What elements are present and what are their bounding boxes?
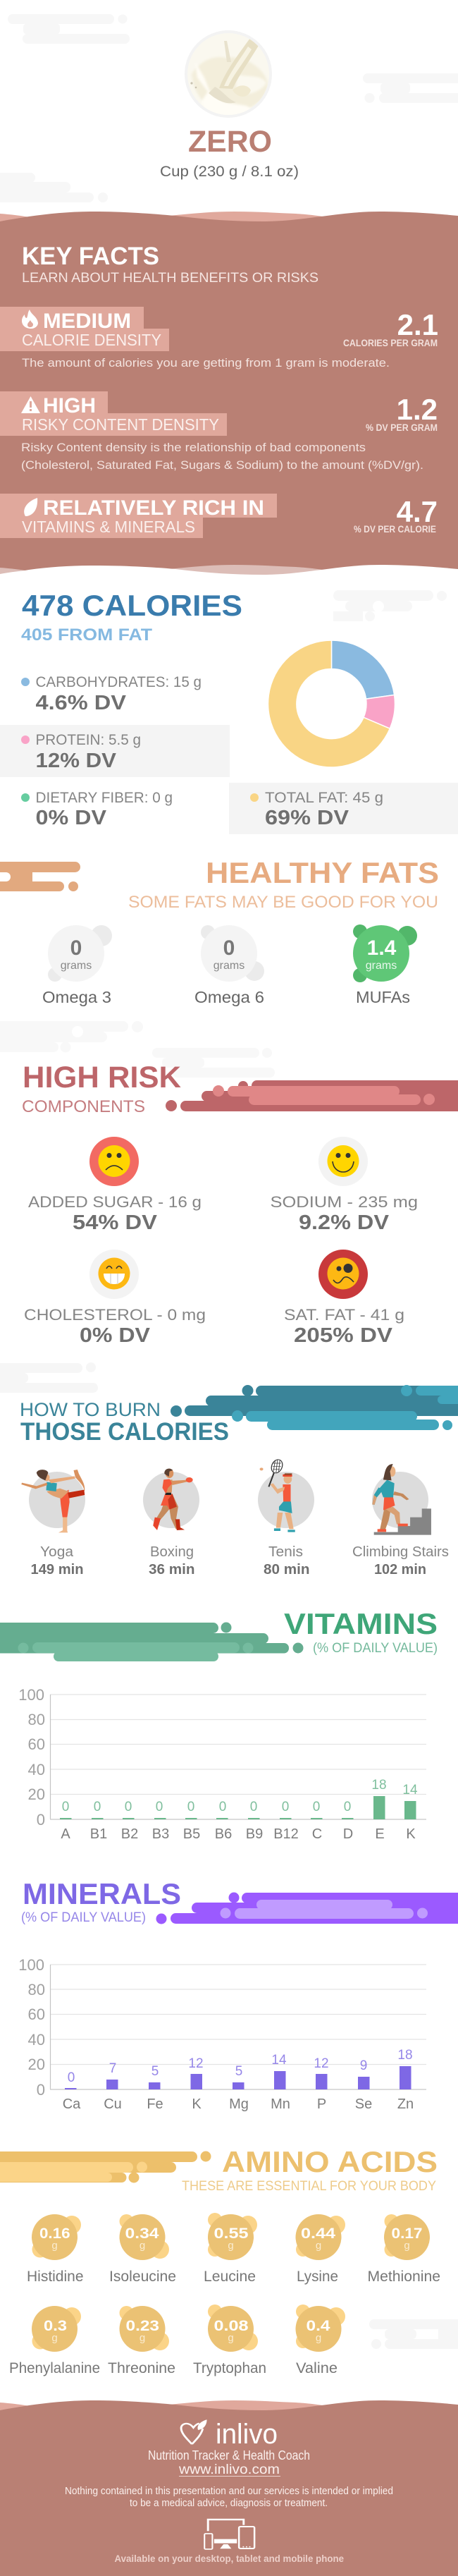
amino: phenylalanine: 0.3	[44, 2318, 67, 2334]
label: climbing stairs: Climbing Stairs	[352, 1544, 449, 1560]
stat: mufas: MUFAs	[356, 988, 410, 1006]
label: boxing: 36 min	[149, 1562, 194, 1577]
panel: how to burn those calories	[20, 1385, 458, 1577]
fact: vitamins and minerals: % DV PER CALORIE	[354, 524, 436, 535]
bar chart: vitamins: B5	[183, 1826, 200, 1842]
legend: carbohydrates	[21, 674, 202, 714]
subheading: key facts: LEARN ABOUT HEALTH BENEFITS OR RISKS	[22, 271, 318, 286]
label: boxing: Boxing	[150, 1544, 194, 1560]
amino: leucine	[204, 2213, 257, 2285]
icon: warning triangle	[21, 396, 40, 413]
subheading: healthy fats: SOME FATS MAY BE GOOD FOR YOU	[128, 893, 438, 912]
stat: omega 3	[42, 925, 112, 1006]
bar chart: vitamins: A	[61, 1826, 70, 1842]
fact: risky content density: HIGH	[43, 394, 96, 417]
icon: flame	[22, 310, 38, 329]
subheading: from fat: 405 FROM FAT	[21, 625, 152, 645]
stat: mufas: 1.4	[367, 936, 397, 960]
legend: protein: 12% DV	[35, 750, 117, 772]
bar chart: minerals: 20	[28, 2056, 45, 2073]
bar chart: vitamins: B1	[90, 1826, 107, 1842]
fact: calorie density: The amount of calories you are getting from 1 gram is moderate.	[22, 356, 390, 370]
bar chart: vitamins: B9	[246, 1826, 263, 1842]
icon: leaf	[24, 498, 37, 516]
amino: tryptophan: 0.08	[214, 2318, 249, 2334]
donut chart	[268, 640, 395, 767]
bar chart: minerals: Se	[355, 2096, 372, 2112]
amino: leucine: 0.55	[214, 2226, 249, 2242]
component: added sugar: ADDED SUGAR - 16 g	[28, 1193, 202, 1211]
fact: risky content density: (Cholesterol, Saturated Fat, Sugars & Sodium) to the amount (%DV/gr).	[21, 458, 423, 472]
bar chart: vitamins: D	[343, 1826, 353, 1842]
legend: total fat: 69% DV	[265, 807, 349, 829]
component: sodium: 9.2% DV	[299, 1211, 390, 1234]
bar chart: vitamins: B6	[215, 1826, 232, 1842]
bar chart: minerals: Cu	[104, 2096, 122, 2112]
logo: inlivo	[181, 2419, 278, 2450]
logo: inlivo: inlivo	[216, 2419, 278, 2450]
legend: total fat	[229, 783, 458, 834]
component: sodium: SODIUM - 235 mg	[271, 1193, 418, 1211]
component: saturated fat	[284, 1250, 404, 1347]
heading: those calories: THOSE CALORIES	[20, 1418, 229, 1446]
bar chart: vitamins: 20	[28, 1786, 45, 1803]
amino: lysine: Lysine	[297, 2269, 338, 2285]
amino: phenylalanine: g	[51, 2332, 58, 2344]
amino: valine: 0.4	[306, 2318, 330, 2334]
panel: amino acids	[0, 2145, 440, 2376]
subheading: minerals: (% OF DAILY VALUE)	[21, 1910, 146, 1925]
tagline: Nutrition Tracker & Health Coach	[148, 2448, 310, 2462]
fact: vitamins and minerals: VITAMINS & MINERALS	[22, 518, 195, 536]
fact: calorie density: MEDIUM	[43, 310, 131, 333]
fact: risky content density: Risky Content density is the relationship of bad components	[21, 441, 366, 454]
component: sodium	[271, 1137, 418, 1234]
bar chart: vitamins: B3	[152, 1826, 169, 1842]
bar chart: minerals: 7	[109, 2061, 116, 2076]
bar chart: vitamins: 14	[402, 1783, 418, 1797]
amino: valine	[296, 2305, 345, 2376]
fact: risky content density: RISKY CONTENT DENSITY	[22, 415, 219, 434]
bar chart: vitamins: 0	[187, 1800, 194, 1814]
heading: how to burn: HOW TO BURN	[20, 1399, 161, 1420]
amino: threonine: Threonine	[108, 2360, 175, 2376]
label: tennis	[264, 1544, 310, 1577]
amino: leucine: g	[228, 2240, 234, 2252]
bar chart: vitamins: 0	[94, 1800, 101, 1814]
bar chart: vitamins: 0	[282, 1800, 289, 1814]
amino: tryptophan: Tryptophan	[193, 2360, 266, 2376]
banner: vitamins	[0, 1622, 303, 1661]
bar chart: vitamins	[18, 1686, 426, 1842]
bar chart: vitamins: 0	[125, 1800, 132, 1814]
value: 4.7: 4.7	[397, 495, 438, 528]
bar chart: vitamins: 0	[37, 1811, 45, 1829]
fact: vitamins and minerals: RELATIVELY RICH IN	[43, 496, 264, 520]
component: saturated fat: SAT. FAT - 41 g	[284, 1306, 404, 1324]
bar chart: vitamins: 80	[28, 1711, 45, 1728]
bar chart: vitamins: 40	[28, 1761, 45, 1778]
panel: minerals	[18, 1877, 458, 2112]
legend: carbohydrates: CARBOHYDRATES: 15 g	[35, 674, 202, 690]
amino: isoleucine: g	[140, 2240, 145, 2252]
bar chart: minerals: 0	[68, 2070, 75, 2085]
stat: omega 3: grams	[61, 960, 92, 972]
bar chart: minerals: K	[192, 2096, 202, 2112]
label: yoga: Yoga	[40, 1544, 74, 1560]
value: 2.1: 2.1	[397, 308, 438, 341]
label: tennis: Tenis	[268, 1544, 303, 1560]
amino: valine: Valine	[296, 2360, 338, 2376]
bar chart: minerals: 14	[271, 2053, 287, 2068]
bar chart: vitamins: K	[406, 1826, 416, 1842]
banner: how to burn	[171, 1385, 458, 1430]
stat: omega 3: Omega 3	[42, 988, 111, 1006]
stat: omega 3: 0	[70, 936, 82, 960]
bar chart: vitamins: 0	[313, 1800, 320, 1814]
website link: www.inlivo.com	[178, 2462, 280, 2477]
bar chart: minerals: Zn	[397, 2096, 414, 2112]
component: cholesterol: 0% DV	[80, 1324, 151, 1347]
fact: vitamins and minerals	[0, 494, 438, 538]
component: added sugar	[28, 1137, 202, 1234]
availability note: Available on your desktop, tablet and mobile phone	[114, 2553, 344, 2564]
bar chart: minerals: Fe	[147, 2096, 163, 2112]
bar chart: minerals: 0	[37, 2081, 45, 2099]
bar chart: vitamins: 60	[28, 1735, 45, 1753]
amino: threonine: g	[140, 2332, 145, 2344]
amino: threonine: 0.23	[125, 2318, 159, 2334]
bar chart: minerals: Ca	[63, 2096, 81, 2112]
subheading: components: COMPONENTS	[22, 1097, 145, 1116]
heading: minerals: MINERALS	[23, 1877, 181, 1910]
disclaimer: to be a medical advice, diagnosis or treatment.	[130, 2497, 328, 2509]
activity: yoga	[21, 1470, 85, 1532]
panel: vitamins	[0, 1607, 438, 1842]
heading: amino acids: AMINO ACIDS	[222, 2145, 438, 2178]
amino: methionine: 0.17	[392, 2226, 423, 2242]
bar chart: minerals: P	[317, 2096, 326, 2112]
amino: threonine	[108, 2306, 175, 2376]
fact: calorie density: CALORIE DENSITY	[22, 331, 161, 349]
bar chart: minerals: 40	[28, 2031, 45, 2049]
heading: vitamins: VITAMINS	[284, 1607, 438, 1640]
fact: risky content density	[0, 391, 438, 472]
legend: protein: PROTEIN: 5.5 g	[35, 732, 141, 748]
bar chart: vitamins: 0	[62, 1800, 69, 1814]
legend: dietary fiber	[21, 790, 173, 829]
legend: carbohydrates: 4.6% DV	[35, 692, 127, 714]
heading: key facts: KEY FACTS	[22, 243, 159, 270]
amino: histidine: Histidine	[27, 2269, 83, 2285]
amino: tryptophan: g	[228, 2332, 234, 2344]
bar chart: minerals: 5	[235, 2064, 242, 2079]
amino: histidine	[27, 2214, 83, 2285]
activity: tennis	[258, 1458, 314, 1532]
banner: minerals	[156, 1893, 458, 1924]
bar chart: vitamins: E	[375, 1826, 385, 1842]
bar chart: vitamins: 0	[250, 1800, 257, 1814]
subheading: amino acids: THESE ARE ESSENTIAL FOR YOUR BODY	[182, 2179, 436, 2194]
legend: dietary fiber: DIETARY FIBER: 0 g	[35, 790, 173, 806]
bar chart: vitamins: 0	[344, 1800, 351, 1814]
bar chart: vitamins: 0	[156, 1800, 163, 1814]
bar chart: minerals: 100	[18, 1956, 44, 1974]
icon: devices	[204, 2520, 254, 2549]
bar chart: vitamins: 100	[18, 1686, 44, 1704]
subheading: vitamins: (% OF DAILY VALUE)	[313, 1641, 438, 1656]
banner: amino acids	[0, 2151, 211, 2183]
amino: methionine: Methionine	[368, 2269, 440, 2285]
disclaimer	[65, 2485, 393, 2509]
bar chart: minerals: Mn	[271, 2096, 290, 2112]
banner: healthy fats	[0, 862, 80, 891]
food image: milk splash	[185, 30, 272, 120]
disclaimer: Nothing contained in this presentation and our services is intended or implied	[65, 2485, 393, 2497]
value: 1.2: 1.2	[397, 393, 438, 426]
fact: risky content density: % DV PER GRAM	[366, 422, 438, 433]
label: yoga: 149 min	[31, 1562, 83, 1577]
stat: omega 6	[194, 925, 264, 1006]
title: ZERO	[188, 125, 272, 159]
stat: mufas: grams	[366, 960, 397, 972]
bar chart: vitamins: 18	[371, 1778, 387, 1793]
fact: calorie density: CALORIES PER GRAM	[343, 338, 438, 348]
heading: healthy fats: HEALTHY FATS	[206, 856, 439, 889]
component: cholesterol: CHOLESTEROL - 0 mg	[24, 1306, 206, 1324]
activity: climbing stairs	[372, 1464, 431, 1535]
amino: methionine	[368, 2214, 440, 2285]
component: added sugar: 54% DV	[73, 1211, 158, 1234]
label: climbing stairs	[352, 1544, 449, 1577]
amino: phenylalanine	[9, 2306, 100, 2376]
activity: boxing	[143, 1469, 199, 1530]
bar chart: vitamins: B2	[121, 1826, 138, 1842]
component: cholesterol	[24, 1250, 206, 1347]
bar chart: minerals: 18	[397, 2048, 413, 2063]
panel: key facts	[0, 212, 458, 585]
bar chart: minerals: 80	[28, 1981, 45, 1998]
amino: tryptophan	[193, 2305, 266, 2376]
amino: lysine	[296, 2214, 345, 2285]
bar chart: minerals: Mg	[229, 2096, 249, 2112]
bar chart: vitamins: 0	[219, 1800, 226, 1814]
amino: lysine: 0.44	[301, 2226, 335, 2242]
label: tennis: 80 min	[264, 1562, 310, 1577]
amino: leucine: Leucine	[204, 2269, 256, 2285]
amino: phenylalanine: Phenylalanine	[9, 2360, 100, 2376]
amino: isoleucine: Isoleucine	[109, 2269, 176, 2285]
footer	[0, 2400, 458, 2576]
fact: calorie density	[0, 307, 438, 370]
bar chart: minerals: 12	[188, 2056, 204, 2071]
stat: omega 6: 0	[223, 936, 235, 960]
stat: omega 6: Omega 6	[194, 988, 264, 1006]
heading: calories: 478 CALORIES	[22, 589, 242, 622]
legend: protein	[0, 725, 230, 777]
bar chart: minerals	[18, 1956, 426, 2112]
heading: high risk: HIGH RISK	[23, 1061, 181, 1094]
serving size: Cup (230 g / 8.1 oz)	[160, 164, 299, 180]
component: saturated fat: 205% DV	[294, 1324, 393, 1347]
amino: methionine: g	[404, 2240, 410, 2252]
amino: lysine: g	[316, 2240, 321, 2252]
stat: omega 6: grams	[213, 960, 245, 972]
banner: high risk	[166, 1080, 458, 1111]
panel: calories	[0, 589, 458, 834]
amino: valine: g	[316, 2332, 321, 2344]
label: climbing stairs: 102 min	[374, 1562, 426, 1577]
stat: mufas	[353, 924, 417, 1006]
label: boxing	[149, 1544, 194, 1577]
bar chart: minerals: 12	[314, 2056, 329, 2071]
amino: histidine: g	[51, 2240, 58, 2252]
bar chart: vitamins: C	[312, 1826, 322, 1842]
legend: total fat: TOTAL FAT: 45 g	[265, 790, 383, 806]
amino: isoleucine: 0.34	[125, 2226, 159, 2242]
panel: healthy fats	[0, 856, 439, 1006]
bar chart: minerals: 60	[28, 2006, 45, 2023]
label: yoga	[31, 1544, 83, 1577]
bar chart: minerals: 9	[360, 2058, 367, 2073]
bar chart: minerals: 5	[151, 2064, 159, 2079]
amino: histidine: 0.16	[39, 2226, 70, 2242]
panel: high risk components	[22, 1061, 458, 1347]
amino: isoleucine	[109, 2214, 176, 2285]
bar chart: vitamins: B12	[273, 1826, 299, 1842]
legend: dietary fiber: 0% DV	[35, 807, 107, 829]
